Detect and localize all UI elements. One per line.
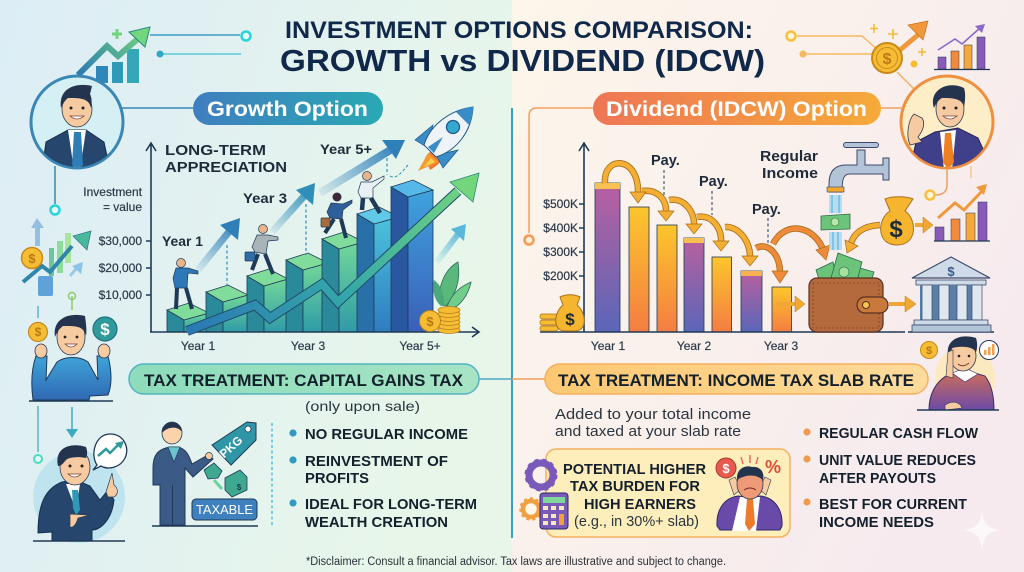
- list: dividend bullets: [803, 425, 979, 531]
- axis labels: Year 3: [291, 339, 325, 353]
- chart labels: APPRECIATION: [165, 159, 287, 176]
- text: only upon sale: (only upon sale): [305, 398, 420, 414]
- growth pill connector: [122, 107, 193, 109]
- person: stressed investor: [716, 455, 782, 531]
- list: dividend bullets: BEST FOR CURRENT: [819, 496, 967, 513]
- axis labels: $200K: [543, 269, 578, 283]
- panel: higher tax burden: HIGH EARNERS: [584, 496, 696, 513]
- chart labels: Income: [762, 166, 818, 182]
- icon: top-left growth arrow chart: [78, 27, 150, 83]
- icon: investor with price tag and taxable label: $: [237, 483, 242, 492]
- icon: calculator: [540, 493, 568, 529]
- icon: left small growth chart with coin: [22, 218, 91, 296]
- chart labels: LONG-TERM: [165, 142, 266, 159]
- panel: higher tax burden: (e.g., in 30%+ slab): [574, 514, 699, 530]
- icon: bank: [912, 257, 991, 332]
- icon: coin with rising arrow: [870, 21, 928, 73]
- person: pointing advisor with speech bubble: [33, 434, 127, 543]
- icon: investor with price tag and taxable label: [152, 422, 258, 526]
- connector: portrait to side chart: [50, 166, 60, 214]
- person: dividend advisor portrait: [901, 76, 993, 170]
- icon: orange gear: [520, 498, 542, 520]
- list: dividend bullets: UNIT VALUE REDUCES: [819, 452, 976, 469]
- axes: [540, 143, 994, 332]
- axis labels: Year 2: [677, 339, 711, 353]
- icon: money bag and coin stack: [540, 295, 584, 331]
- icon: money bag and coin stack: $: [565, 310, 575, 329]
- chart labels: Regular: [760, 149, 818, 165]
- year arrows: [198, 140, 466, 285]
- person: growth advisor portrait: [31, 76, 123, 170]
- icon: water tap: [821, 145, 889, 250]
- axis labels: $400K: [543, 221, 578, 235]
- list: growth bullets: NO REGULAR INCOME: [305, 426, 468, 443]
- icon: purple gear: [526, 460, 556, 490]
- chart labels: Pay.: [699, 174, 728, 190]
- panel: higher tax burden: TAX BURDEN FOR: [570, 478, 700, 495]
- list: growth bullets: PROFITS: [305, 470, 369, 487]
- heading: Dividend (IDCW) Option pill: Dividend (IDCW) Option: [606, 98, 867, 121]
- axis labels: $10,000: [99, 288, 142, 302]
- icon: top-right bar chart: [934, 24, 990, 70]
- list: dividend bullets: INCOME NEEDS: [819, 514, 934, 531]
- chart bars: [167, 180, 433, 332]
- connectors top-right: [786, 32, 915, 90]
- payout curved arrows: fill: [605, 163, 880, 273]
- icon: plant and coins: [420, 262, 471, 334]
- arrows to wallet and bank: [776, 217, 933, 312]
- panel: higher tax burden: POTENTIAL HIGHER: [563, 461, 706, 478]
- connector: tax pills: [479, 378, 545, 380]
- climbing figures: [173, 172, 384, 309]
- axes: [146, 143, 479, 337]
- axis labels: Year 1: [181, 339, 215, 353]
- heading: income tax slab pill: [545, 364, 928, 394]
- background: growth side: [0, 0, 512, 572]
- trend arrow: [187, 173, 479, 331]
- heading: Growth Option pill: Growth Option: [207, 98, 368, 121]
- icon: rocket: [390, 107, 473, 177]
- center divider: [511, 108, 513, 538]
- text: added to total income: [555, 407, 751, 440]
- heading: capital gains tax pill: [129, 364, 479, 394]
- list: growth bullets: WEALTH CREATION: [305, 514, 448, 531]
- chart labels: [162, 142, 372, 249]
- dividend pill connectors: [524, 108, 971, 244]
- list: growth bullets: REINVESTMENT OF: [305, 453, 448, 470]
- title: INVESTMENT OPTIONS COMPARISON:: [285, 17, 753, 44]
- heading: capital gains tax pill: TAX TREATMENT: CAPITAL GAINS TAX: [144, 371, 464, 390]
- list: growth bullets: IDEAL FOR LONG-TERM: [305, 496, 477, 513]
- text: disclaimer: *Disclaimer: Consult a financial advisor. Tax laws are illustrative and subject to change.: [306, 556, 726, 568]
- list: dividend bullets: REGULAR CASH FLOW: [819, 425, 979, 442]
- axis labels: = value: [103, 200, 142, 214]
- growth chart: [83, 107, 479, 353]
- axis labels: $20,000: [99, 261, 142, 275]
- connectors below man with coins: [34, 406, 78, 463]
- heading: income tax slab pill: TAX TREATMENT: INCOME TAX SLAB RATE: [558, 371, 914, 390]
- heading: Dividend (IDCW) Option pill: [593, 92, 881, 125]
- panel: higher tax burden: [520, 449, 790, 537]
- list: dividend bullets: AFTER PAYOUTS: [819, 470, 936, 487]
- icon: left small growth chart with coin: $: [28, 251, 36, 266]
- person: man with coins: $: [35, 325, 42, 339]
- person: thinking investor: [917, 336, 999, 410]
- person: thinking investor: $: [926, 345, 932, 357]
- icon: money bag: [881, 197, 914, 245]
- axis labels: [543, 197, 798, 353]
- text: added to total income: and taxed at your slab rate: [555, 424, 741, 440]
- icon: right bar chart: [934, 184, 990, 241]
- axis labels: Year 5+: [399, 339, 441, 353]
- axis labels: Year 3: [764, 339, 798, 353]
- person: man with coins: [28, 292, 117, 401]
- dividend chart: [540, 143, 994, 353]
- icon: coin with rising arrow: $: [883, 51, 892, 68]
- chart labels: Year 1: [162, 234, 203, 249]
- person: man with coins: $: [100, 320, 110, 339]
- person: stressed investor: %: [765, 457, 781, 477]
- axis labels: Investment: [83, 185, 143, 199]
- axis labels: Year 1: [591, 339, 625, 353]
- background: dividend side: [512, 0, 1024, 572]
- chart labels: [651, 149, 818, 218]
- connector lines top-left: [150, 32, 250, 58]
- dashed markers: [664, 170, 768, 243]
- axis labels: $300K: [543, 245, 578, 259]
- chart labels: Pay.: [752, 202, 781, 218]
- icon: wallet with cash: [809, 253, 888, 332]
- icon: plant and coins: $: [426, 314, 434, 329]
- text: added to total income: Added to your total income: [555, 407, 751, 423]
- icon: bank: $: [947, 264, 955, 279]
- title: GROWTH vs DIVIDEND (IDCW): [280, 43, 765, 78]
- person: stressed investor: $: [722, 461, 730, 476]
- list: growth bullets: [289, 426, 477, 531]
- title: [280, 17, 765, 78]
- axis labels: [83, 185, 441, 353]
- chart labels: Year 5+: [320, 142, 372, 157]
- icon: investor with price tag and taxable label: PKG: [217, 433, 245, 461]
- chart labels: Year 3: [243, 191, 288, 206]
- axis labels: $500K: [543, 197, 578, 211]
- chart bars: [595, 183, 792, 332]
- icon: sparkle: [964, 512, 1000, 549]
- heading: Growth Option pill: [193, 92, 383, 125]
- icon: investor with price tag and taxable label: TAXABLE: [196, 502, 253, 517]
- payout curved arrows: outlines: [605, 163, 880, 273]
- icon: money bag: $: [889, 216, 903, 243]
- chart labels: Pay.: [651, 153, 680, 169]
- axis labels: $30,000: [99, 234, 142, 248]
